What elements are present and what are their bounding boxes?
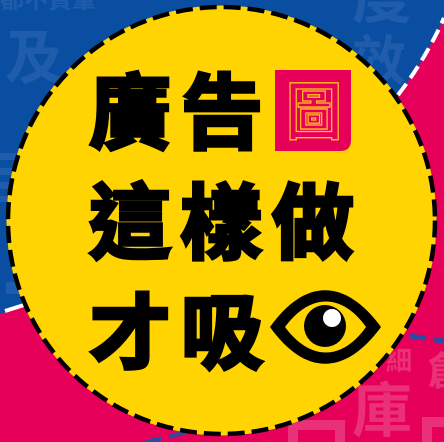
ghost text on blue panel: 及 (5, 26, 63, 91)
headline line 1: 廣告 (89, 69, 263, 160)
blue dashed edge bottom (146, 430, 196, 442)
blue dashed edge lower right (410, 336, 444, 341)
ghost shapes at bottom edge (288, 417, 444, 442)
ghost strokes at left edge (0, 153, 22, 294)
blue background panel (0, 0, 444, 314)
icon: pink image box: 圖 (286, 77, 342, 148)
icon: eye (270, 290, 381, 364)
headline line 2: 這樣做 (89, 179, 354, 270)
icon: pink image box (275, 70, 351, 151)
ghost text on blue panel: 效 (352, 32, 406, 92)
white dashed edge (398, 18, 444, 95)
ghost text on pink panel: 細 (386, 346, 412, 376)
ghost text on blue panel (0, 0, 412, 92)
headline line 3: 才吸 (89, 289, 263, 380)
white dash lower left (5, 305, 24, 311)
ghost text on pink panel (352, 346, 444, 442)
